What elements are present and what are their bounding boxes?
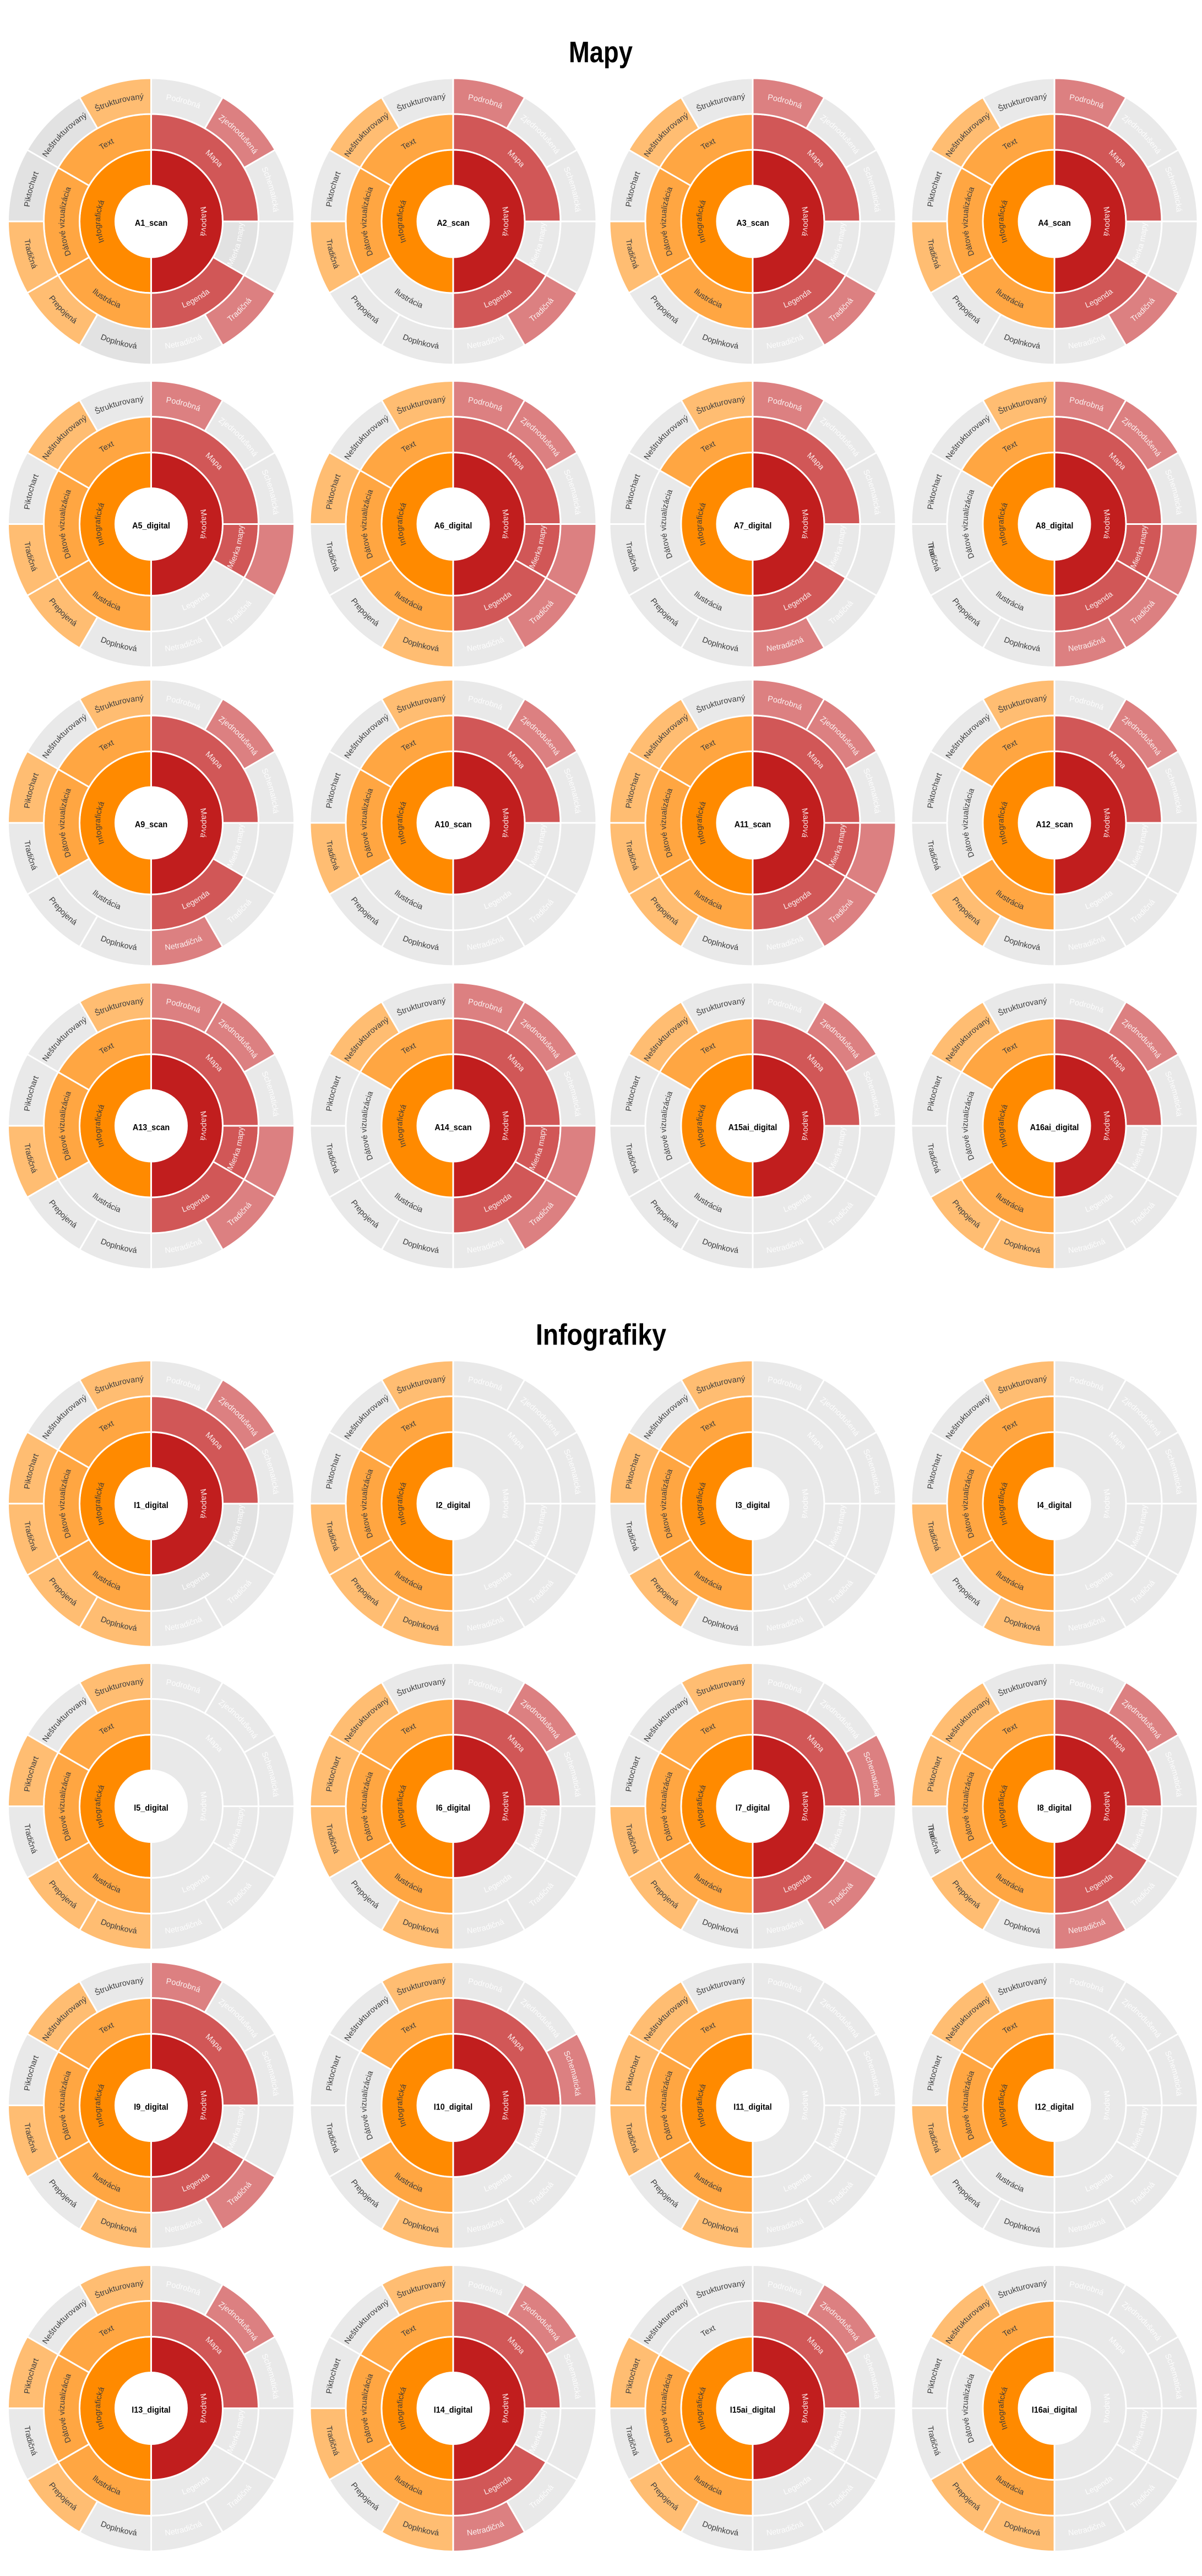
segments bbox=[310, 1360, 596, 1647]
center label: I1_digital bbox=[134, 1500, 168, 1510]
labels: left half: Infografická Dátové vizualizácia Text IlustráciaPiktochartNeštrukturovaný Štrukturovaný DoplnkováPrepojenáTradičná bbox=[24, 997, 143, 1253]
segments bbox=[310, 983, 596, 1269]
labels: right half: MapováMapa Mierka mapy LegendaPodrobná Zjednodušená Schematická Tradičná Netradičná bbox=[1068, 696, 1183, 950]
center label: A14_scan bbox=[434, 1122, 472, 1132]
segments bbox=[8, 1360, 294, 1647]
center label: A13_scan bbox=[133, 1122, 170, 1132]
labels: left half: Infografická Dátové vizualizácia Text IlustráciaPiktochartNeštrukturovaný Štrukturovaný DoplnkováPrepojenáTradičná bbox=[626, 93, 745, 349]
center label: A7_digital bbox=[734, 521, 771, 531]
heading: Infografiky: Infografiky bbox=[536, 1319, 666, 1352]
labels: right half: MapováMapa Mierka mapy LegendaPodrobná Zjednodušená Schematická Tradičná Netradičná bbox=[1068, 1678, 1183, 1936]
labels: right half: MapováMapa Mierka mapy LegendaPodrobná Zjednodušená Schematická Tradičná Netradičná bbox=[165, 1678, 280, 1936]
segments bbox=[911, 1663, 1198, 1950]
labels: right half: MapováMapa Mierka mapy LegendaPodrobná Zjednodušená Schematická Tradičná Netradičná bbox=[766, 999, 881, 1253]
center label: A10_scan bbox=[434, 820, 472, 829]
chart: A8_digital bbox=[911, 381, 1198, 668]
segments bbox=[310, 381, 596, 668]
segments bbox=[911, 78, 1198, 365]
segments bbox=[8, 78, 294, 365]
chart: I14_digital bbox=[310, 2265, 596, 2551]
labels: left half: Infografická Dátové vizualizácia Text IlustráciaPiktochartNeštrukturovaný Štrukturovaný DoplnkováPrepojenáTradičná bbox=[326, 695, 445, 950]
center label: I13_digital bbox=[132, 2405, 171, 2415]
segments bbox=[610, 1360, 896, 1647]
segments bbox=[911, 2265, 1198, 2551]
labels: right half: MapováMapa Mierka mapy LegendaPodrobná Zjednodušená Schematická Tradičná Netradičná bbox=[1068, 1977, 1183, 2235]
center label: I15ai_digital bbox=[730, 2405, 775, 2415]
chart: A15ai_digital bbox=[610, 983, 896, 1269]
segments bbox=[8, 2265, 294, 2551]
labels: left half: Infografická Dátové vizualizácia Text IlustráciaPiktochartNeštrukturovaný Štrukturovaný DoplnkováPrepojenáTradičná bbox=[24, 93, 143, 349]
labels: left half: Infografická Dátové vizualizácia Text IlustráciaPiktochartNeštrukturovaný Štrukturovaný DoplnkováPrepojenáTradičná bbox=[926, 1976, 1048, 2235]
center label: A9_scan bbox=[135, 820, 167, 829]
labels: left half: Infografická Dátové vizualizácia Text IlustráciaPiktochartNeštrukturovaný Štrukturovaný DoplnkováPrepojenáTradičná bbox=[624, 1677, 746, 1936]
chart: A7_digital bbox=[610, 381, 896, 668]
chart: I12_digital bbox=[911, 1962, 1198, 2248]
center label: A11_scan bbox=[735, 820, 771, 829]
segments bbox=[310, 78, 596, 365]
chart: I16ai_digital bbox=[911, 2265, 1198, 2551]
segments bbox=[8, 381, 294, 668]
labels: right half: MapováMapa Mierka mapy LegendaPodrobná Zjednodušená Schematická Tradičná Netradičná bbox=[1068, 2280, 1183, 2538]
labels: left half: Infografická Dátové vizualizácia Text IlustráciaPiktochartNeštrukturovaný Štrukturovaný DoplnkováPrepojenáTradičná bbox=[624, 1976, 746, 2235]
chart: A6_digital bbox=[310, 381, 596, 668]
chart: I6_digital bbox=[310, 1663, 596, 1950]
labels: right half: MapováMapa Mierka mapy LegendaPodrobná Zjednodušená Schematická Tradičná Netradičná bbox=[466, 1977, 582, 2235]
segments bbox=[911, 381, 1198, 668]
chart: A13_scan bbox=[8, 983, 294, 1269]
chart: I10_digital bbox=[310, 1962, 596, 2248]
labels: left half: Infografická Dátové vizualizácia Text IlustráciaPiktochartNeštrukturovaný Štrukturovaný DoplnkováPrepojenáTradičná bbox=[626, 395, 745, 651]
labels: left half: Infografická Dátové vizualizácia Text IlustráciaPiktochartNeštrukturovaný Štrukturovaný DoplnkováPrepojenáTradičnáTra bbox=[927, 395, 1047, 651]
labels: right half: MapováMapa Mierka mapy LegendaPodrobná Zjednodušená Schematická Tradičná Netradičná bbox=[766, 1678, 882, 1936]
center label: I9_digital bbox=[134, 2102, 168, 2112]
segments bbox=[8, 1962, 294, 2248]
chart: I8_digital bbox=[911, 1663, 1198, 1950]
center label: A4_scan bbox=[1038, 218, 1071, 228]
heading: Mapy: Mapy bbox=[569, 36, 633, 69]
labels: right half: MapováMapa Mierka mapy LegendaPodrobná Zjednodušená Schematická Tradičná Netradičná bbox=[165, 397, 279, 651]
segments bbox=[310, 2265, 596, 2551]
labels: left half: Infografická Dátové vizualizácia Text IlustráciaPiktochartNeštrukturovaný Štrukturovaný DoplnkováPrepojenáTradičná bbox=[22, 1976, 144, 2235]
labels: right half: MapováMapa Mierka mapy LegendaPodrobná Zjednodušená Schematická Tradičná Netradičná bbox=[467, 397, 581, 651]
labels: left half: Infografická Dátové vizualizácia Text IlustráciaPiktochartNeštrukturovaný Štrukturovaný DoplnkováPrepojenáTradičná bbox=[927, 997, 1047, 1253]
chart: I9_digital bbox=[8, 1962, 294, 2248]
segments bbox=[8, 983, 294, 1269]
segments bbox=[911, 680, 1198, 966]
center label: I16ai_digital bbox=[1032, 2405, 1077, 2415]
labels: left half: Infografická Dátové vizualizácia Text IlustráciaPiktochartNeštrukturovaný Štrukturovaný DoplnkováPrepojenáTradičná bbox=[624, 2279, 746, 2538]
chart: A1_scan bbox=[8, 78, 294, 365]
labels: right half: MapováMapa Mierka mapy LegendaPodrobná Zjednodušená Schematická Tradičná Netradičná bbox=[467, 999, 581, 1253]
labels: right half: MapováMapa Mierka mapy LegendaPodrobná Zjednodušená Schematická Tradičná Netradičná bbox=[165, 1977, 280, 2235]
labels: left half: Infografická Dátové vizualizácia Text IlustráciaPiktochartNeštrukturovaný Štrukturovaný DoplnkováPrepojenáTradičná bbox=[626, 695, 745, 950]
segments bbox=[911, 983, 1198, 1269]
center label: A8_digital bbox=[1036, 521, 1073, 531]
labels: right half: MapováMapa Mierka mapy LegendaPodrobná Zjednodušená Schematická Tradičná Netradičná bbox=[467, 1377, 581, 1631]
center label: I8_digital bbox=[1037, 1803, 1072, 1813]
center label: I3_digital bbox=[736, 1500, 770, 1510]
labels: right half: MapováMapa Mierka mapy LegendaPodrobná Zjednodušená Schematická Tradičná Netradičná bbox=[766, 1977, 882, 2235]
chart: A2_scan bbox=[310, 78, 596, 365]
labels: right half: MapováMapa Mierka mapy LegendaPodrobná Zjednodušená Schematická Tradičná Netradičná bbox=[1068, 397, 1183, 651]
center label: I7_digital bbox=[736, 1803, 770, 1813]
segments bbox=[310, 680, 596, 966]
center label: I5_digital bbox=[134, 1803, 168, 1813]
labels: right half: MapováMapa Mierka mapy LegendaPodrobná Zjednodušená Schematická Tradičná Netradičná bbox=[766, 696, 881, 950]
center label: I14_digital bbox=[434, 2405, 472, 2415]
labels: right half: MapováMapa Mierka mapy LegendaPodrobná Zjednodušená Schematická Tradičná Netradičná bbox=[466, 1678, 582, 1936]
labels: right half: MapováMapa Mierka mapy LegendaPodrobná Zjednodušená Schematická Tradičná Netradičná bbox=[766, 397, 881, 651]
center label: I10_digital bbox=[434, 2102, 472, 2112]
labels: right half: MapováMapa Mierka mapy LegendaPodrobná Zjednodušená Schematická Tradičná Netradičná bbox=[1068, 94, 1183, 349]
segments bbox=[310, 1962, 596, 2248]
labels: right half: MapováMapa Mierka mapy LegendaPodrobná Zjednodušená Schematická Tradičná Netradičná bbox=[467, 94, 581, 349]
chart: A4_scan bbox=[911, 78, 1198, 365]
chart: I3_digital bbox=[610, 1360, 896, 1647]
center label: A6_digital bbox=[434, 521, 472, 531]
center label: A5_digital bbox=[132, 521, 170, 531]
chart: A11_scan bbox=[610, 680, 896, 966]
labels: left half: Infografická Dátové vizualizácia Text IlustráciaPiktochartNeštrukturovaný Štrukturovaný DoplnkováPrepojenáTradičná bbox=[926, 1375, 1048, 1633]
labels: left half: Infografická Dátové vizualizácia Text IlustráciaPiktochartNeštrukturovaný Štrukturovaný DoplnkováPrepojenáTradičná bbox=[626, 997, 745, 1253]
chart: A10_scan bbox=[310, 680, 596, 966]
chart: I7_digital bbox=[610, 1663, 896, 1950]
center label: I12_digital bbox=[1035, 2102, 1074, 2112]
labels: left half: Infografická Dátové vizualizácia Text IlustráciaPiktochartNeštrukturovaný Štrukturovaný DoplnkováPrepojenáTradičná bbox=[326, 1375, 445, 1631]
labels: right half: MapováMapa Mierka mapy LegendaPodrobná Zjednodušená Schematická Tradičná Netradičná bbox=[766, 1377, 881, 1631]
chart: A14_scan bbox=[310, 983, 596, 1269]
chart: A3_scan bbox=[610, 78, 896, 365]
labels: left half: Infografická Dátové vizualizácia Text IlustráciaPiktochartNeštrukturovaný Štrukturovaný DoplnkováPrepojenáTradičnáTra bbox=[926, 1677, 1048, 1936]
center label: A2_scan bbox=[437, 218, 470, 228]
segments bbox=[911, 1962, 1198, 2248]
segments bbox=[310, 1663, 596, 1950]
labels: left half: Infografická Dátové vizualizácia Text IlustráciaPiktochartNeštrukturovaný Štrukturovaný DoplnkováPrepojenáTradičná bbox=[324, 1677, 447, 1936]
labels: right half: MapováMapa Mierka mapy LegendaPodrobná Zjednodušená Schematická Tradičná Netradičná bbox=[165, 95, 279, 349]
center label: I11_digital bbox=[733, 2102, 772, 2112]
segments bbox=[8, 1663, 294, 1950]
center label: I2_digital bbox=[436, 1500, 470, 1510]
chart: I15ai_digital bbox=[610, 2265, 896, 2551]
chart: I13_digital bbox=[8, 2265, 294, 2551]
center label: A15ai_digital bbox=[728, 1122, 777, 1132]
panel: Infografiky section bbox=[8, 1360, 1198, 2551]
chart: I5_digital bbox=[8, 1663, 294, 1950]
labels: left half: Infografická Dátové vizualizácia Text IlustráciaPiktochartNeštrukturovaný Štrukturovaný DoplnkováPrepojenáTradičná bbox=[326, 997, 445, 1253]
chart: I2_digital bbox=[310, 1360, 596, 1647]
labels: right half: MapováMapa Mierka mapy LegendaPodrobná Zjednodušená Schematická Tradičná Netradičná bbox=[165, 1377, 279, 1631]
segments bbox=[610, 1663, 896, 1950]
segments bbox=[911, 1360, 1198, 1647]
labels: right half: MapováMapa Mierka mapy LegendaPodrobná Zjednodušená Schematická Tradičná Netradičná bbox=[165, 696, 279, 950]
center label: A16ai_digital bbox=[1030, 1122, 1079, 1132]
chart: A12_scan bbox=[911, 680, 1198, 966]
labels: right half: MapováMapa Mierka mapy LegendaPodrobná Zjednodušená Schematická Tradičná Netradičná bbox=[1068, 1375, 1183, 1633]
center label: I6_digital bbox=[436, 1803, 470, 1813]
chart: A5_digital bbox=[8, 381, 294, 668]
labels: right half: MapováMapa Mierka mapy LegendaPodrobná Zjednodušená Schematická Tradičná Netradičná bbox=[766, 94, 881, 349]
labels: left half: Infografická Dátové vizualizácia Text IlustráciaPiktochartNeštrukturovaný Štrukturovaný DoplnkováPrepojenáTradičná bbox=[927, 695, 1047, 950]
center label: I4_digital bbox=[1037, 1500, 1072, 1510]
segments bbox=[610, 983, 896, 1269]
labels: left half: Infografická Dátové vizualizácia Text IlustráciaPiktochartNeštrukturovaný Štrukturovaný DoplnkováPrepojenáTradičná bbox=[326, 93, 445, 349]
chart: I11_digital bbox=[610, 1962, 896, 2248]
labels: right half: MapováMapa Mierka mapy LegendaPodrobná Zjednodušená Schematická Tradičná Netradičná bbox=[766, 2280, 882, 2538]
chart: A9_scan bbox=[8, 680, 294, 966]
center label: A3_scan bbox=[736, 218, 769, 228]
labels: left half: Infografická Dátové vizualizácia Text IlustráciaPiktochartNeštrukturovaný Štrukturovaný DoplnkováPrepojenáTradičná bbox=[927, 93, 1047, 349]
segments bbox=[8, 680, 294, 966]
chart: I4_digital bbox=[911, 1360, 1198, 1647]
labels: left half: Infografická Dátové vizualizácia Text IlustráciaPiktochartNeštrukturovaný Štrukturovaný DoplnkováPrepojenáTradičná bbox=[24, 695, 143, 950]
labels: right half: MapováMapa Mierka mapy LegendaPodrobná Zjednodušená Schematická Tradičná Netradičná bbox=[466, 2280, 582, 2538]
labels: left half: Infografická Dátové vizualizácia Text IlustráciaPiktochartNeštrukturovaný Štrukturovaný DoplnkováPrepojenáTradičná bbox=[926, 2279, 1048, 2538]
labels: left half: Infografická Dátové vizualizácia Text IlustráciaPiktochartNeštrukturovaný Štrukturovaný DoplnkováPrepojenáTradičná bbox=[324, 1976, 447, 2235]
labels: left half: Infografická Dátové vizualizácia Text IlustráciaPiktochartNeštrukturovaný Štrukturovaný DoplnkováPrepojenáTradičná bbox=[326, 395, 445, 651]
segments bbox=[610, 78, 896, 365]
labels: left half: Infografická Dátové vizualizácia Text IlustráciaPiktochartNeštrukturovaný Štrukturovaný DoplnkováPrepojenáTradičná bbox=[624, 1375, 746, 1633]
segments bbox=[610, 680, 896, 966]
segments bbox=[610, 1962, 896, 2248]
labels: left half: Infografická Dátové vizualizácia Text IlustráciaPiktochartNeštrukturovaný Štrukturovaný DoplnkováPrepojenáTradičná bbox=[22, 1677, 144, 1936]
panel: Mapy section bbox=[8, 78, 1198, 1269]
center label: A1_scan bbox=[135, 218, 167, 228]
labels: left half: Infografická Dátové vizualizácia Text IlustráciaPiktochartNeštrukturovaný Štrukturovaný DoplnkováPrepojenáTradičná bbox=[24, 1375, 143, 1631]
segments bbox=[610, 2265, 896, 2551]
labels: right half: MapováMapa Mierka mapy LegendaPodrobná Zjednodušená Schematická Tradičná Netradičná bbox=[467, 696, 581, 950]
labels: left half: Infografická Dátové vizualizácia Text IlustráciaPiktochartNeštrukturovaný Štrukturovaný DoplnkováPrepojenáTradičná bbox=[22, 2279, 144, 2538]
segments bbox=[610, 381, 896, 668]
chart: A16ai_digital bbox=[911, 983, 1198, 1269]
labels: right half: MapováMapa Mierka mapy LegendaPodrobná Zjednodušená Schematická Tradičná Netradičná bbox=[165, 2280, 280, 2538]
center label: A12_scan bbox=[1036, 820, 1073, 829]
labels: left half: Infografická Dátové vizualizácia Text IlustráciaPiktochartNeštrukturovaný Štrukturovaný DoplnkováPrepojenáTradičná bbox=[324, 2279, 447, 2538]
labels: right half: MapováMapa Mierka mapy LegendaPodrobná Zjednodušená Schematická Tradičná Netradičná bbox=[1068, 999, 1183, 1253]
chart: I1_digital bbox=[8, 1360, 294, 1647]
labels: right half: MapováMapa Mierka mapy LegendaPodrobná Zjednodušená Schematická Tradičná Netradičná bbox=[165, 999, 279, 1253]
labels: left half: Infografická Dátové vizualizácia Text IlustráciaPiktochartNeštrukturovaný Štrukturovaný DoplnkováPrepojenáTradičná bbox=[24, 395, 143, 651]
